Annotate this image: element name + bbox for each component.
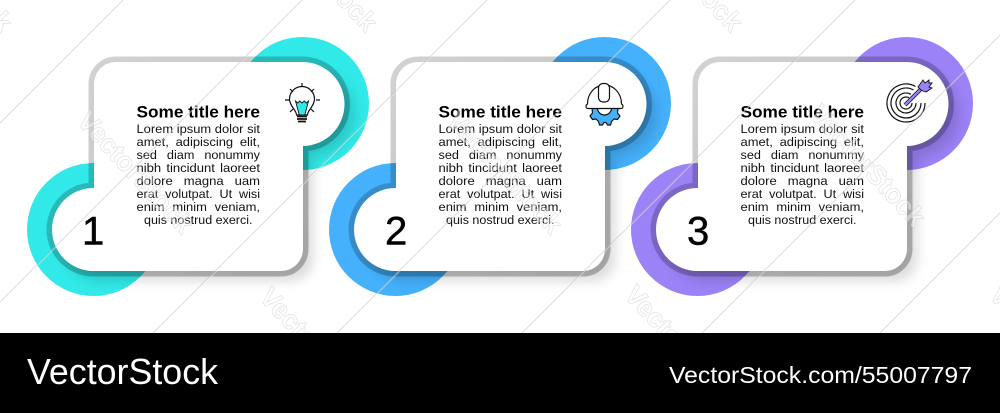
text block 2: erat volutpat. Ut wisi bbox=[438, 187, 562, 201]
text block 1: dolore magna uam bbox=[136, 174, 260, 188]
upper ring 1 bbox=[236, 37, 369, 170]
watermark overlay: VectorStock bbox=[619, 280, 747, 413]
text block 3: sed diam nonummy bbox=[740, 148, 865, 162]
icon: light bulb bbox=[285, 83, 320, 122]
upper ring 2 bbox=[538, 37, 671, 170]
text block 2 bbox=[438, 122, 563, 227]
lower ring 3 bbox=[631, 163, 764, 296]
text block 1 bbox=[136, 122, 261, 227]
logo text: VectorStock bbox=[27, 351, 219, 392]
title 1: Some title here bbox=[136, 102, 260, 122]
text block 2: Lorem ipsum dolor sit bbox=[438, 122, 563, 136]
text block 3: erat volutpat. Ut wisi bbox=[740, 187, 864, 201]
text block 3: dolore magna uam bbox=[740, 174, 864, 188]
text block 1: amet, adipiscing elit, bbox=[136, 135, 260, 149]
text block 2: quis nostrud exerci. bbox=[446, 213, 554, 227]
title 2: Some title here bbox=[438, 102, 562, 122]
text block 2: dolore magna uam bbox=[438, 174, 562, 188]
card shadow 2 bbox=[364, 72, 656, 281]
text block 1: enim minim veniam, bbox=[136, 200, 260, 214]
lower ring 2 bbox=[329, 163, 462, 296]
number 1: 1 bbox=[82, 210, 104, 254]
icon: helmet and gear bbox=[586, 84, 623, 125]
image id text: VectorStock.com/55007797 bbox=[669, 362, 972, 388]
number 2: 2 bbox=[385, 210, 407, 254]
text block 1: quis nostrud exerci. bbox=[144, 213, 252, 227]
text block 1: erat volutpat. Ut wisi bbox=[136, 187, 260, 201]
card body 3 bbox=[656, 62, 948, 271]
text block 1: Lorem ipsum dolor sit bbox=[136, 122, 261, 136]
text block 3 bbox=[740, 122, 865, 227]
icon: target and arrow bbox=[887, 80, 932, 122]
text block 3: nibh tincidunt laoreet bbox=[740, 161, 865, 175]
panel: step 3 bbox=[631, 37, 973, 296]
lower ring 1 bbox=[27, 163, 160, 296]
panel: step 2 bbox=[329, 37, 671, 296]
text block 2: enim minim veniam, bbox=[438, 200, 562, 214]
text block 2: sed diam nonummy bbox=[438, 148, 563, 162]
card shadow 1 bbox=[62, 72, 355, 281]
text block 3: enim minim veniam, bbox=[740, 200, 864, 214]
card body 2 bbox=[354, 62, 646, 271]
text block 2: nibh tincidunt laoreet bbox=[438, 161, 563, 175]
card outline 1 bbox=[52, 62, 345, 271]
card outline 3 bbox=[656, 62, 948, 271]
card outline 2 bbox=[354, 62, 646, 271]
panel: step 1 bbox=[27, 37, 369, 296]
title 3: Some title here bbox=[740, 102, 864, 122]
watermark overlay: VectorStock bbox=[254, 282, 382, 413]
number 3: 3 bbox=[687, 210, 709, 254]
watermark overlay: VectorStock bbox=[804, 99, 932, 233]
upper ring 3 bbox=[840, 37, 973, 170]
watermark overlay: VectorStock bbox=[441, 106, 569, 240]
footer bar bbox=[0, 333, 1000, 413]
text block 3: amet, adipiscing elit, bbox=[740, 135, 864, 149]
text block 1: sed diam nonummy bbox=[136, 148, 261, 162]
text block 2: amet, adipiscing elit, bbox=[438, 135, 562, 149]
watermark overlay: VectorStock bbox=[72, 106, 200, 240]
text block 3: quis nostrud exerci. bbox=[748, 213, 856, 227]
card shadow 3 bbox=[666, 72, 958, 281]
text block 3: Lorem ipsum dolor sit bbox=[740, 122, 865, 136]
text block 1: nibh tincidunt laoreet bbox=[136, 161, 261, 175]
card body 1 bbox=[52, 62, 345, 271]
